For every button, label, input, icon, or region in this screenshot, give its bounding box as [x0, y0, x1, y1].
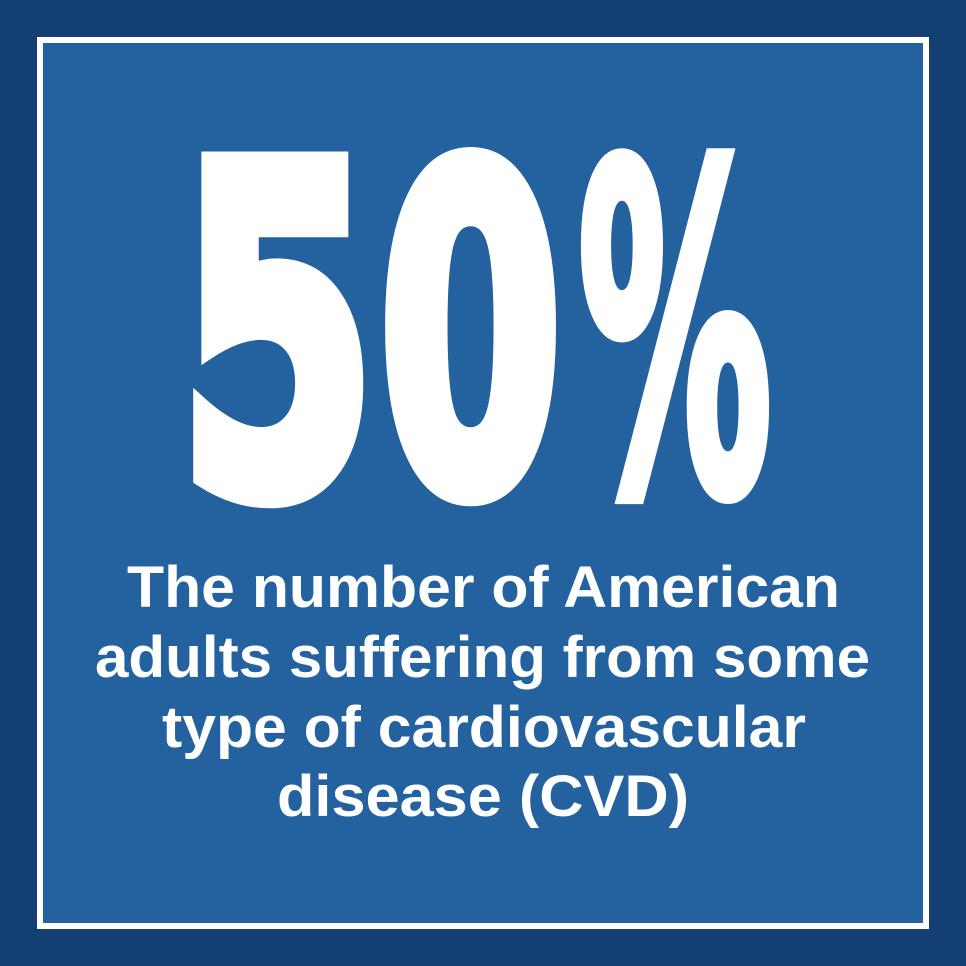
caption line 2: adults suffering from some: [95, 625, 870, 690]
caption line 3: type of cardiovascular: [162, 695, 806, 760]
digit 0: 0: [379, 76, 562, 595]
digit 5: 5: [179, 75, 375, 596]
percent sign: %: [578, 73, 772, 597]
caption text block: [95, 555, 870, 829]
big statistic: 50%: [179, 73, 772, 597]
caption line 1: The number of American: [127, 555, 840, 620]
caption line 4: disease (CVD): [277, 764, 689, 829]
